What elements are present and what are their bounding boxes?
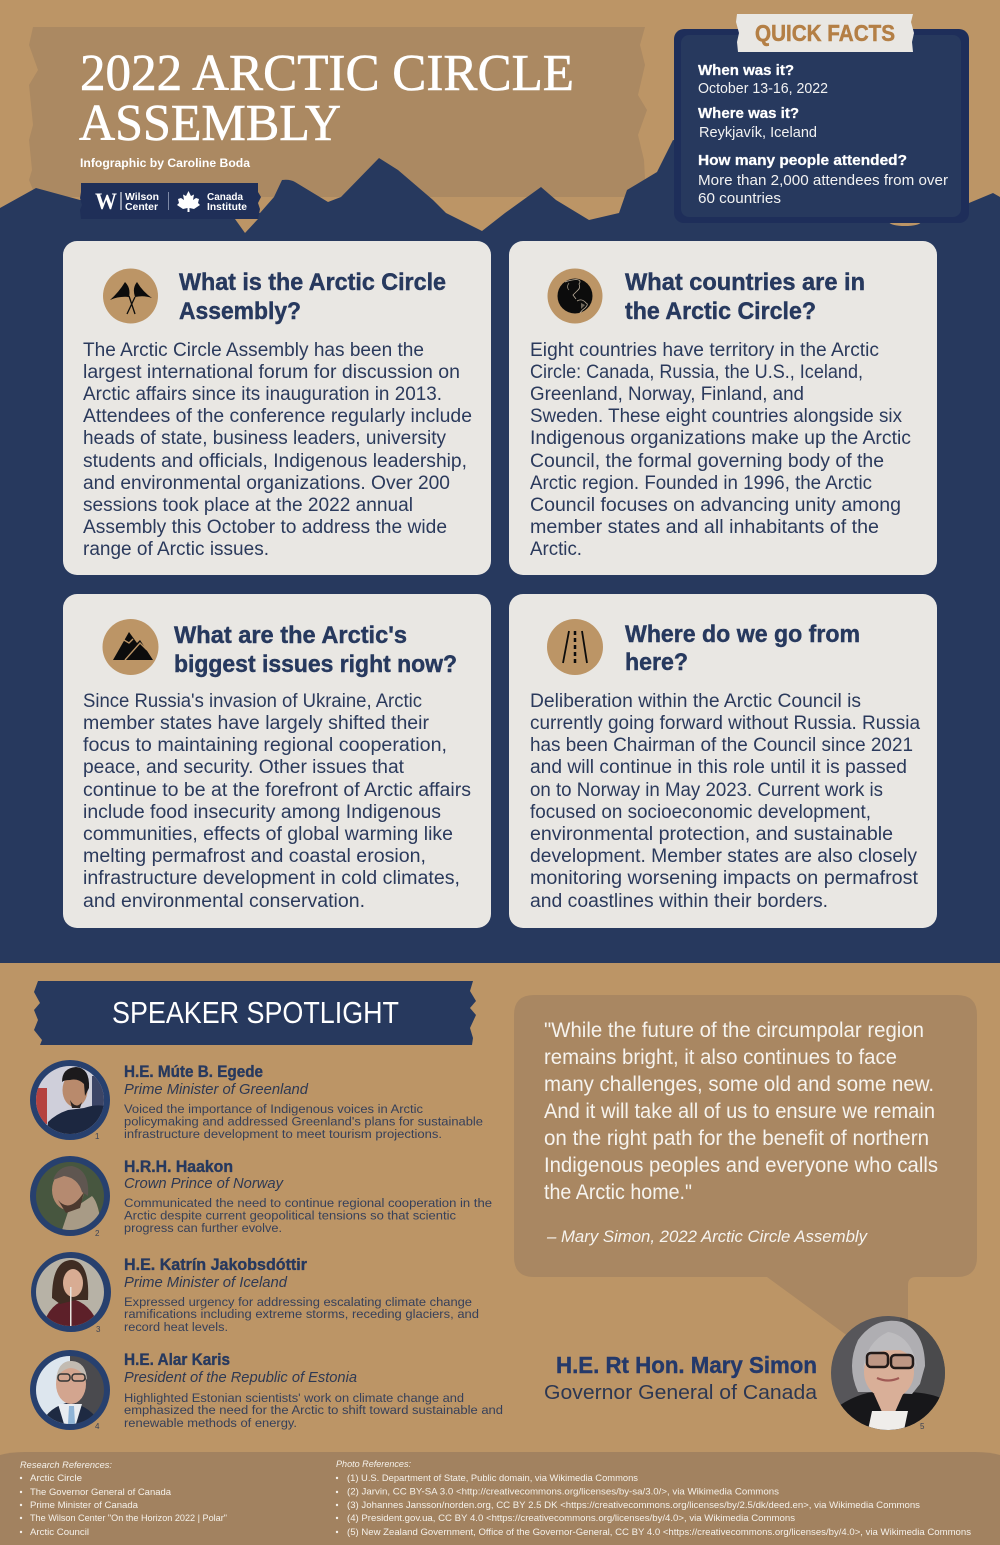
heading: the Arctic Circle? bbox=[625, 298, 816, 325]
speaker text: H.E. Múte B. Egede bbox=[124, 1063, 263, 1081]
photo credit 1: 1 bbox=[95, 1132, 100, 1141]
photo references: (3) Johannes Jansson/norden.org, CC BY 2.5 DK <https://creativecommons.org/licenses/by/2.5/dk/deed.en>, via Wikimedia Commons bbox=[347, 1500, 920, 1510]
body text: Greenland, Norway, Finland, and bbox=[530, 384, 804, 405]
panel: what countries are in the Arctic Circle bbox=[509, 241, 937, 575]
mountain notch bbox=[235, 219, 258, 233]
research references: Research References: bbox=[20, 1460, 112, 1470]
body text: Arctic affairs since its inauguration in 2013. bbox=[83, 384, 442, 405]
portrait: Karis bbox=[30, 1350, 110, 1431]
photo credit 3: 3 bbox=[96, 1325, 101, 1334]
body text: Arctic. bbox=[530, 539, 582, 560]
quote text: Indigenous peoples and everyone who calls bbox=[544, 1154, 938, 1177]
speaker spotlight banner bbox=[34, 981, 476, 1045]
photo references: (4) President.gov.ua, CC BY 4.0 <https://creativecommons.org/licenses/by/4.0>, via Wikimedia Commons bbox=[347, 1513, 795, 1523]
photo credit 2: 2 bbox=[95, 1229, 100, 1238]
Mary Simon name and role bbox=[544, 1352, 818, 1404]
portrait: Mary Simon bbox=[831, 1316, 945, 1431]
body text: Assembly this October to address the wide bbox=[83, 517, 447, 538]
speaker: Egede bbox=[30, 1060, 483, 1141]
speaker text: Voiced the importance of Indigenous voices in Arctic bbox=[124, 1102, 423, 1116]
body text: sessions took place at the 2022 annual bbox=[83, 495, 413, 516]
fact: when bbox=[698, 62, 828, 97]
body text bbox=[530, 340, 911, 560]
speaker text: Communicated the need to continue regional cooperation in the bbox=[124, 1196, 492, 1210]
research references: Prime Minister of Canada bbox=[30, 1500, 139, 1510]
callout: quote bubble bbox=[514, 995, 977, 1345]
body text: and environmental organizations. Over 200 bbox=[83, 473, 450, 494]
body text: include food insecurity among Indigenous bbox=[83, 802, 441, 823]
quote text: many challenges, some old and some new. bbox=[544, 1073, 934, 1096]
quick facts heading: QUICK FACTS bbox=[755, 20, 895, 46]
speaker text: policymaking and addressed Greenland's plans for sustainable bbox=[124, 1114, 483, 1128]
speaker: Karis bbox=[30, 1350, 503, 1431]
body text: environmental protection, and sustainable bbox=[530, 824, 893, 845]
panel: where do we go from here bbox=[509, 594, 937, 928]
body text: Arctic region. Founded in 1996, the Arctic bbox=[530, 473, 872, 494]
body text: focused on socioeconomic development, bbox=[530, 802, 871, 823]
body text bbox=[83, 340, 472, 560]
speaker: Jakobsdottir bbox=[30, 1252, 479, 1334]
speaker text bbox=[124, 1351, 503, 1430]
quick facts tape bbox=[736, 14, 914, 52]
speaker text bbox=[124, 1158, 492, 1235]
fact: attendance: How many people attended? bbox=[698, 152, 907, 169]
body text: Circle: Canada, Russia, the U.S., Iceland, bbox=[530, 362, 863, 383]
speaker text: Prime Minister of Greenland bbox=[124, 1081, 309, 1098]
quote text: remains bright, it also continues to face bbox=[544, 1046, 897, 1069]
body text: focus to maintaining regional cooperation, bbox=[83, 735, 447, 756]
speaker text: infrastructure development to meet tourism projections. bbox=[124, 1127, 442, 1141]
logo: Wilson Center and Canada Institute: Wilson bbox=[125, 191, 159, 203]
icon: globe bbox=[548, 268, 602, 324]
heading: here? bbox=[625, 649, 688, 676]
fact: when: When was it? bbox=[698, 62, 794, 79]
byline: Infographic by Caroline Boda bbox=[80, 156, 250, 170]
speaker text: Crown Prince of Norway bbox=[124, 1175, 284, 1192]
photo references: Photo References: bbox=[336, 1459, 411, 1469]
body text bbox=[83, 691, 471, 912]
body text: Attendees of the conference regularly include bbox=[83, 406, 472, 427]
photo references bbox=[336, 1459, 971, 1537]
panel: biggest issues bbox=[63, 594, 491, 928]
quote text bbox=[544, 1019, 938, 1204]
body text: Eight countries have territory in the Arctic bbox=[530, 340, 879, 361]
body text: continue to be at the forefront of Arctic affairs bbox=[83, 780, 471, 801]
body text: Council, the formal governing body of the bbox=[530, 451, 884, 472]
body text: melting permafrost and coastal erosion, bbox=[83, 846, 426, 867]
speaker text: progress can further evolve. bbox=[124, 1221, 282, 1235]
heading bbox=[179, 269, 446, 325]
body text: development. Member states are also closely bbox=[530, 846, 918, 867]
photo references: (5) New Zealand Government, Office of the Governor-General, CC BY 4.0 <https://creativecommons.org/licenses/by/4.0>, via Wikimedia Commons bbox=[347, 1527, 971, 1537]
mountain range background bbox=[0, 140, 1000, 963]
fact: attendance: 60 countries bbox=[698, 190, 781, 207]
body text: Since Russia's invasion of Ukraine, Arctic bbox=[83, 691, 422, 712]
body text: Deliberation within the Arctic Council is bbox=[530, 691, 861, 712]
quote attribution: – Mary Simon, 2022 Arctic Circle Assembly bbox=[546, 1228, 869, 1246]
heading: Where do we go from bbox=[625, 621, 860, 648]
body text: currently going forward without Russia. Russia bbox=[530, 713, 920, 734]
speaker text bbox=[124, 1256, 479, 1334]
quote text: the Arctic home." bbox=[544, 1181, 692, 1204]
body text: Sweden. These eight countries alongside six bbox=[530, 406, 902, 427]
body text: member states and all inhabitants of the bbox=[530, 517, 879, 538]
speaker text bbox=[124, 1063, 483, 1141]
heading bbox=[625, 621, 860, 676]
fact: attendance: More than 2,000 attendees from over bbox=[698, 172, 948, 189]
body text: and coastlines within their borders. bbox=[530, 891, 828, 912]
heading: What countries are in bbox=[625, 269, 865, 296]
body text: and will continue in this role until it is passed bbox=[530, 757, 907, 778]
research references: Arctic Circle bbox=[30, 1473, 82, 1483]
speaker text: emphasized the need for the Arctic to shift toward sustainable and bbox=[124, 1403, 503, 1417]
heading bbox=[174, 622, 457, 678]
Mary Simon name and role: Governor General of Canada bbox=[544, 1382, 818, 1404]
heading: What is the Arctic Circle bbox=[179, 269, 446, 296]
heading: Assembly? bbox=[179, 298, 301, 325]
title: 2022 ARCTIC CIRCLE bbox=[80, 45, 574, 102]
fact: attendance bbox=[698, 152, 948, 207]
fact: when: October 13-16, 2022 bbox=[698, 80, 828, 97]
logo: Wilson Center and Canada Institute: W bbox=[95, 189, 117, 214]
speaker text: record heat levels. bbox=[124, 1320, 228, 1334]
quote text: And it will take all of us to ensure we remain bbox=[544, 1100, 935, 1123]
icon: road bbox=[547, 619, 603, 675]
speaker text: H.R.H. Haakon bbox=[124, 1158, 233, 1176]
logo: Wilson Center and Canada Institute: Institute bbox=[207, 201, 247, 213]
speaker text: H.E. Alar Karis bbox=[124, 1351, 230, 1369]
portrait: Haakon bbox=[30, 1156, 110, 1238]
speaker section background bbox=[0, 963, 1000, 1453]
speaker text: ramifications including extreme storms, receding glaciers, and bbox=[124, 1307, 479, 1321]
title bbox=[79, 45, 574, 152]
speaker spotlight banner: SPEAKER SPOTLIGHT bbox=[112, 995, 399, 1030]
portrait: Jakobsdottir bbox=[30, 1252, 111, 1334]
title: ASSEMBLY bbox=[79, 95, 341, 152]
logo: Wilson Center and Canada Institute bbox=[80, 183, 261, 219]
quote text: on the right path for the benefit of northern bbox=[544, 1127, 929, 1150]
fact: where: Where was it? bbox=[698, 105, 799, 122]
research references: The Wilson Center "On the Horizon 2022 | Polar" bbox=[30, 1513, 227, 1523]
heading: biggest issues right now? bbox=[174, 651, 457, 678]
quote text: "While the future of the circumpolar region bbox=[544, 1019, 924, 1042]
speaker text: Prime Minister of Iceland bbox=[124, 1274, 288, 1291]
body text: largest international forum for discussion on bbox=[83, 362, 460, 383]
body text: communities, effects of global warming like bbox=[83, 824, 453, 845]
body text: The Arctic Circle Assembly has been the bbox=[83, 340, 424, 361]
body text: peace, and security. Other issues that bbox=[83, 757, 405, 778]
tan peak beneath quick facts bbox=[889, 218, 921, 226]
body text: on to Norway in May 2023. Current work is bbox=[530, 780, 883, 801]
title banner bbox=[29, 27, 647, 197]
speaker text: Expressed urgency for addressing escalating climate change bbox=[124, 1295, 472, 1309]
body text: has been Chairman of the Council since 2021 bbox=[530, 735, 913, 756]
research references: The Governor General of Canada bbox=[30, 1487, 172, 1497]
icon: crossed flags bbox=[103, 268, 158, 324]
speaker text: Highlighted Estonian scientists' work on climate change and bbox=[124, 1391, 464, 1405]
logo: Wilson Center and Canada Institute: Center bbox=[125, 201, 158, 213]
fact: where bbox=[698, 105, 817, 141]
speaker text: H.E. Katrín Jakobsdóttir bbox=[124, 1256, 308, 1274]
body text: range of Arctic issues. bbox=[83, 539, 269, 560]
body text: monitoring worsening impacts on permafrost bbox=[530, 868, 919, 889]
body text: heads of state, business leaders, university bbox=[83, 428, 446, 449]
heading bbox=[625, 269, 865, 325]
body text: Council focuses on advancing unity among bbox=[530, 495, 901, 516]
icon: mountains bbox=[102, 619, 158, 675]
panel: what is the Arctic Circle Assembly bbox=[63, 241, 491, 575]
Mary Simon name and role: H.E. Rt Hon. Mary Simon bbox=[556, 1352, 817, 1378]
body text bbox=[530, 691, 920, 912]
fact: where: Reykjavík, Iceland bbox=[699, 124, 817, 141]
body text: and environmental conservation. bbox=[83, 891, 365, 912]
research references bbox=[20, 1460, 227, 1537]
heading: What are the Arctic's bbox=[174, 622, 407, 649]
speaker text: renewable methods of energy. bbox=[124, 1416, 297, 1430]
speaker: Haakon bbox=[30, 1156, 492, 1238]
body text: infrastructure development in cold climates, bbox=[83, 868, 460, 889]
logo: Wilson Center and Canada Institute: Canada bbox=[207, 191, 243, 203]
photo references: (1) U.S. Department of State, Public domain, via Wikimedia Commons bbox=[347, 1473, 638, 1483]
footer: references bbox=[0, 1452, 1000, 1545]
body text: students and officials, Indigenous leadership, bbox=[83, 451, 467, 472]
body text: member states have largely shifted their bbox=[83, 713, 430, 734]
body text: Indigenous organizations make up the Arctic bbox=[530, 428, 911, 449]
speaker text: President of the Republic of Estonia bbox=[124, 1369, 357, 1386]
panel: quick facts bbox=[674, 14, 969, 223]
photo credit 5: 5 bbox=[920, 1422, 925, 1431]
research references: Arctic Council bbox=[30, 1527, 89, 1537]
photo credit 4: 4 bbox=[95, 1422, 100, 1431]
photo references: (2) Jarvin, CC BY-SA 3.0 <http://creativecommons.org/licenses/by-sa/3.0/>, via Wikimedia Commons bbox=[347, 1486, 779, 1496]
portrait: Egede bbox=[30, 1060, 110, 1141]
speaker text: Arctic despite current geopolitical tensions so that scientic bbox=[124, 1208, 456, 1222]
